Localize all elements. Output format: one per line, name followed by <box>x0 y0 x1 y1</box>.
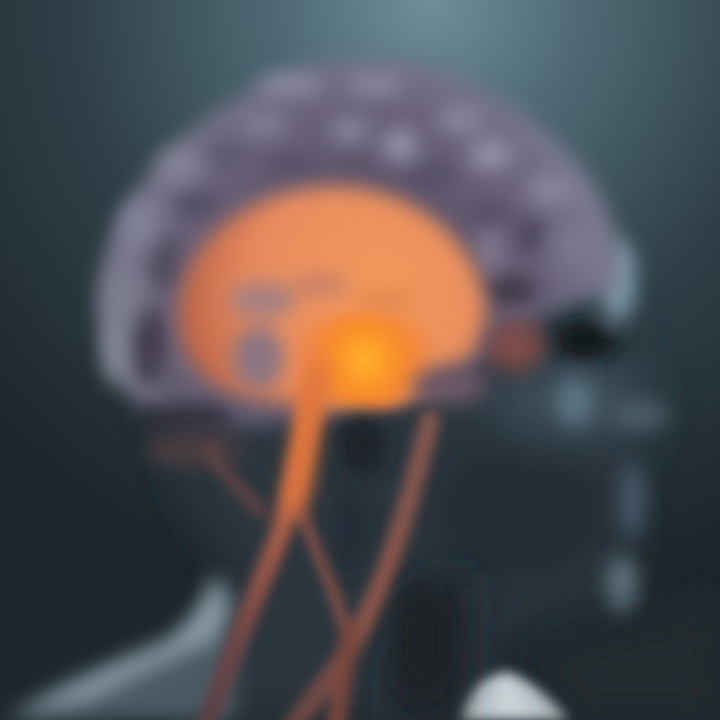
inner grey fold <box>228 273 415 390</box>
head and face silhouette <box>170 300 665 720</box>
cortex folds <box>103 73 599 436</box>
inner orange brain <box>178 186 486 408</box>
brain outer cortex <box>98 59 619 436</box>
shoulder and neck <box>0 570 720 720</box>
dark shadow under brain <box>336 415 446 700</box>
bright glow <box>290 312 440 408</box>
dark-red vessels behind brain <box>145 319 545 466</box>
face highlights <box>553 238 668 615</box>
orange nerve stems <box>205 370 430 720</box>
main stem top <box>295 370 318 500</box>
